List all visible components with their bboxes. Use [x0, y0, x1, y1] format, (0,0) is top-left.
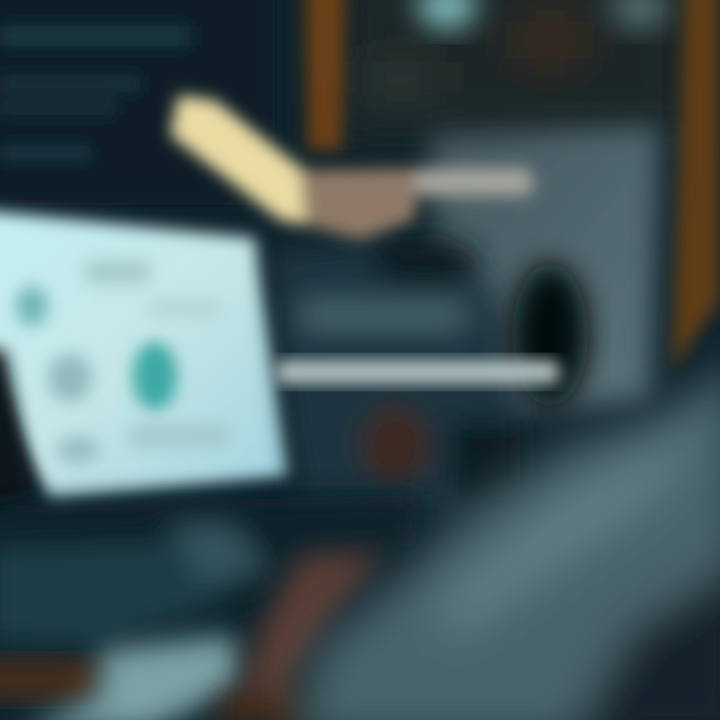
chart: blurred screen content — [16, 260, 230, 464]
highlight: lower white streak — [275, 360, 560, 384]
icon: teal light at top of shelf — [417, 0, 670, 30]
hand — [220, 550, 385, 720]
monitor screen — [0, 210, 290, 500]
background: top-right dark shelf — [340, 0, 690, 135]
panel: dark central area — [272, 235, 520, 510]
panel: desk and keyboard — [0, 495, 420, 650]
panel: grey wall on right — [430, 125, 660, 420]
table: light paper at bottom left — [20, 635, 240, 720]
dark blob at right of centre — [512, 263, 588, 407]
sleeve: grey-teal arm in the foreground — [295, 360, 720, 720]
panel: dark rows of text on the left background — [0, 0, 275, 205]
table: brown desk edge — [0, 662, 105, 698]
monitor: dark left bezel — [0, 350, 35, 515]
highlight: upper cream stroke — [170, 95, 533, 240]
background: wooden posts — [305, 0, 720, 370]
